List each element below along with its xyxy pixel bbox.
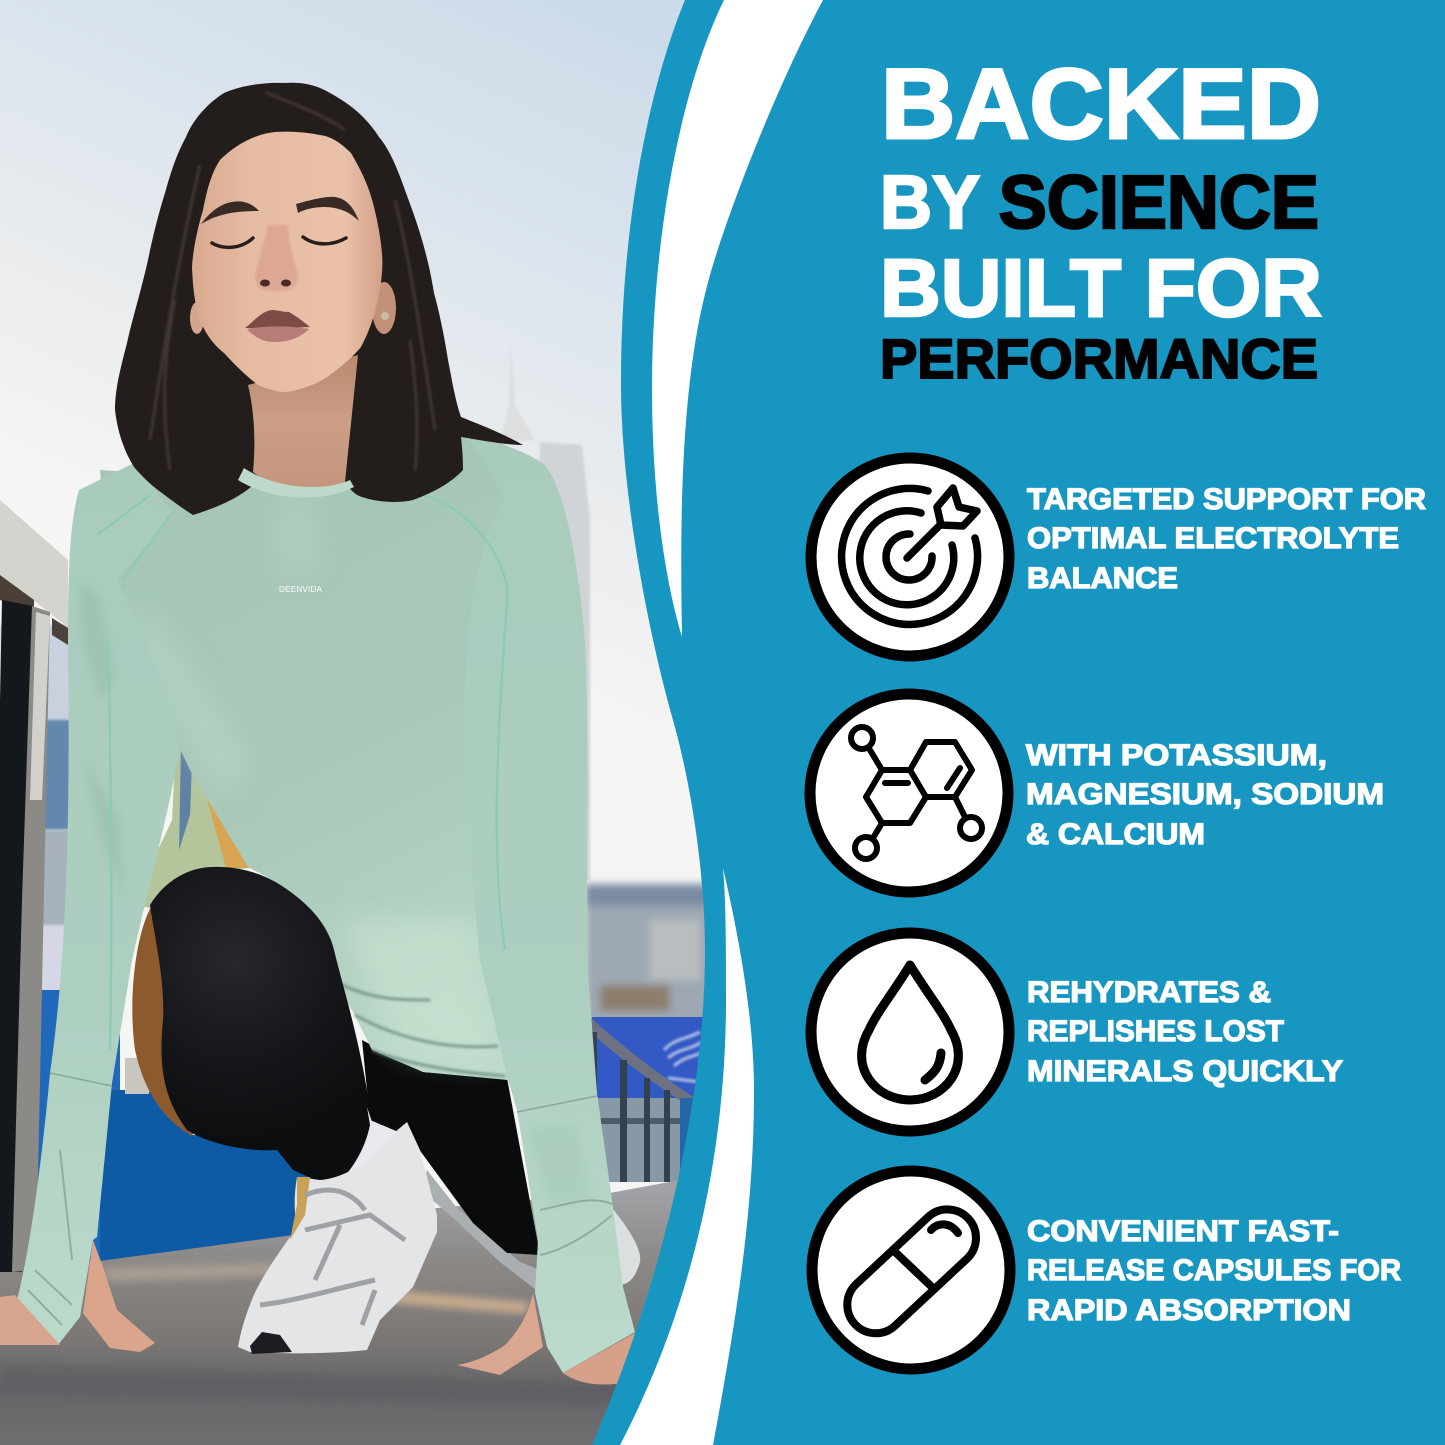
sky background xyxy=(0,0,720,1445)
right hand xyxy=(457,1293,635,1384)
icon: molecule xyxy=(810,694,1008,892)
sock xyxy=(330,1107,420,1210)
hoarding logo xyxy=(664,1032,702,1082)
sleeve shading xyxy=(80,580,590,1205)
text: benefit 3 xyxy=(1027,976,1343,1088)
road light streaks xyxy=(0,1262,640,1405)
thigh and knee xyxy=(150,867,370,1186)
back leg xyxy=(362,1040,540,1255)
cuff seams xyxy=(50,1073,597,1112)
text: benefit 4: RELEASE CAPSULES FOR xyxy=(1027,1254,1401,1287)
shirt seams xyxy=(97,495,508,1050)
right sleeve xyxy=(461,430,635,1373)
heading xyxy=(880,48,1322,390)
eyebrows xyxy=(201,197,359,224)
white swoosh top xyxy=(652,0,823,637)
white swoosh bottom xyxy=(620,868,754,1445)
text: benefit 1 xyxy=(1027,483,1426,595)
text: benefit 4 xyxy=(1027,1215,1401,1327)
distant tower xyxy=(500,340,590,880)
text: benefit 3: REPLISHES LOST xyxy=(1027,1015,1284,1048)
torso xyxy=(100,435,520,1080)
panel: blue curved background xyxy=(592,0,1445,1445)
shoe sole xyxy=(250,1332,292,1354)
shirt logo: DEENVIDA xyxy=(279,585,323,594)
left sleeve xyxy=(17,463,180,1345)
pale strip behind leg xyxy=(125,1058,149,1094)
neck xyxy=(248,355,358,487)
back shoe xyxy=(600,1195,640,1285)
hair strands xyxy=(150,92,435,470)
left ear xyxy=(190,302,204,334)
text: benefit 3: MINERALS QUICKLY xyxy=(1027,1055,1343,1088)
left hand xyxy=(0,1240,155,1352)
icon: water drop xyxy=(811,933,1009,1131)
heading: PERFORMANCE xyxy=(880,327,1318,390)
text: benefit 2 xyxy=(1026,739,1384,851)
gold gap under shirt xyxy=(132,740,250,908)
icon: capsule xyxy=(812,1171,1010,1369)
heading: BY SCIENCE xyxy=(880,160,1319,244)
text: benefit 1: BALANCE xyxy=(1027,562,1178,595)
blue hoarding left xyxy=(100,1090,380,1262)
brown shadow beside knee xyxy=(132,905,210,1136)
lips xyxy=(245,310,310,342)
heading: BUILT FOR xyxy=(880,243,1322,334)
torso highlights xyxy=(130,500,490,1060)
closed eyes xyxy=(212,237,346,247)
text: benefit 1: OPTIMAL ELECTROLYTE xyxy=(1027,522,1399,555)
front shoe xyxy=(238,1122,437,1353)
hair xyxy=(115,83,523,515)
collar xyxy=(238,468,354,498)
text: benefit 4: RAPID ABSORPTION xyxy=(1027,1294,1351,1327)
left background xyxy=(0,625,120,1270)
photo: athlete in starting pose xyxy=(0,0,720,1445)
back heel xyxy=(420,1170,540,1290)
hem folds xyxy=(342,985,505,1076)
street background right xyxy=(585,884,715,1024)
text: benefit 2: WITH POTASSIUM, xyxy=(1026,739,1327,772)
right ear xyxy=(372,282,396,334)
face xyxy=(192,132,382,392)
heading: BACKED xyxy=(881,48,1321,159)
text: benefit 4: CONVENIENT FAST- xyxy=(1027,1215,1339,1248)
text: benefit 3: REHYDRATES & xyxy=(1027,976,1271,1009)
earring xyxy=(381,312,389,320)
road xyxy=(0,1180,720,1445)
nose xyxy=(255,225,298,291)
gold stripe xyxy=(206,795,250,868)
icon: target with arrow xyxy=(811,458,1009,656)
text: benefit 1: TARGETED SUPPORT FOR xyxy=(1027,483,1426,516)
railing post xyxy=(0,500,68,1272)
text: benefit 2: MAGNESIUM, SODIUM xyxy=(1026,778,1384,811)
shoe details xyxy=(260,1190,405,1325)
fence right xyxy=(588,1015,710,1182)
blue hoarding right xyxy=(592,1017,712,1102)
text: benefit 2: & CALCIUM xyxy=(1026,818,1205,851)
cuff folds xyxy=(28,1150,612,1325)
blue gap under shirt xyxy=(179,745,192,850)
shoe gold lace xyxy=(290,1177,310,1240)
